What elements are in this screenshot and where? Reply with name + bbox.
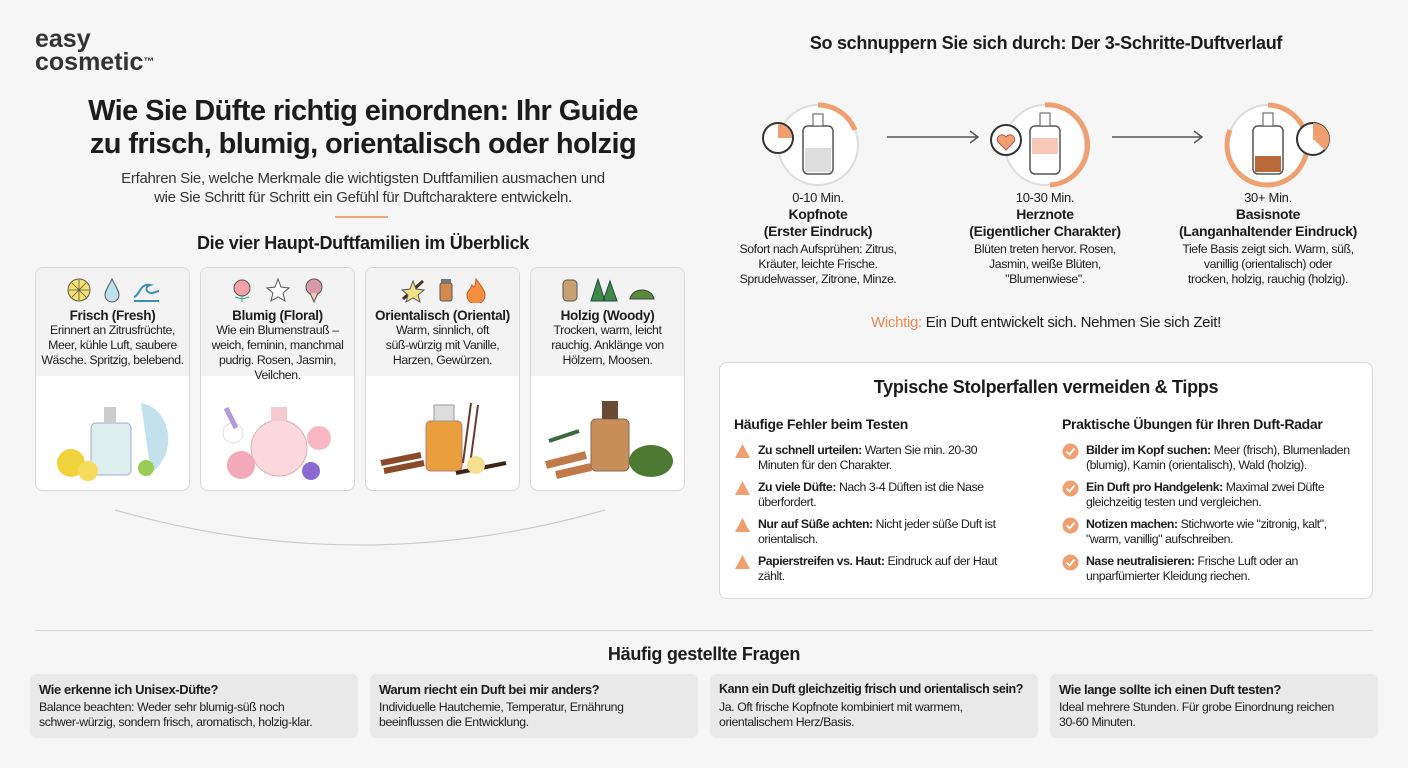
faq 1: [30, 674, 358, 738]
column: mistakes: Papierstreifen vs. Haut: Eindruck auf der Haut: [758, 554, 997, 568]
step 2: Jasmin, weiße Blüten,: [989, 257, 1101, 271]
column: exercises: [1062, 416, 1350, 583]
column: mistakes: Nur auf Süße achten: Nicht jeder süße Duft ist: [758, 517, 996, 531]
step 1: (Erster Eindruck): [764, 223, 872, 239]
column: mistakes: überfordert.: [758, 495, 816, 509]
column: exercises: "warm, vanillig" aufschreiben.: [1086, 532, 1233, 546]
card: orientalisch: süß-würzig mit Vanille, Harzen, Gewürzen.: [386, 338, 499, 367]
column: mistakes: Häufige Fehler beim Testen: [734, 416, 908, 432]
faq 1: schwer-würzig, sondern frisch, aromatisch, holzig-klar.: [39, 715, 312, 729]
faq 1: Wie erkenne ich Unisex-Düfte?: [39, 682, 218, 697]
step 3: Tiefe Basis zeigt sich. Warm, süß,: [1182, 242, 1354, 256]
column: mistakes: Zu viele Düfte: Nach 3-4 Düften ist die Nase: [758, 480, 984, 494]
tips title: Typische Stolperfallen vermeiden & Tipps: [874, 377, 1218, 397]
step 1: Kopfnote: [788, 206, 848, 222]
step 2: Blüten treten hervor. Rosen,: [974, 242, 1116, 256]
step 3: vanillig (orientalisch) oder: [1204, 257, 1332, 271]
column: exercises: (blumig), Kamin (orientalisch), Wald (holzig).: [1086, 458, 1307, 472]
logo: easy: [35, 25, 91, 53]
faq 3: Ja. Oft frische Kopfnote kombiniert mit warmem,: [719, 700, 963, 714]
card: frisch: Erinnert an Zitrusfrüchte, Meer, kühle Luft, saubere Wäsche. Spritzig, belebend.: [41, 323, 184, 367]
heading: families: Die vier Haupt-Duftfamilien im Überblick: [197, 233, 529, 253]
step 2: 10-30 Min.: [1016, 190, 1074, 205]
card: orientalisch: Warm, sinnlich, oft: [396, 323, 489, 337]
step 3: Basisnote: [1236, 206, 1300, 222]
logo: [35, 25, 154, 76]
column: exercises: gleichzeitig testen und vergleichen.: [1086, 495, 1261, 509]
step 2: Herznote: [1016, 206, 1074, 222]
faq 4: [1050, 674, 1378, 738]
faq 3: orientalischem Herz/Basis.: [719, 715, 854, 729]
panel: tips: [719, 362, 1373, 599]
column: mistakes: Minuten für den Charakter.: [758, 458, 892, 472]
step 1: Kräuter, leichte Frische.: [758, 257, 878, 271]
faq 2: beeinflussen die Entwicklung.: [379, 715, 529, 729]
step 3: 30+ Min.: [1244, 190, 1292, 205]
card: blumig: [200, 267, 355, 491]
faq 2: Warum riecht ein Duft bei mir anders?: [379, 682, 599, 697]
step 2: (Eigentlicher Charakter): [969, 223, 1121, 239]
card: frisch: [35, 267, 190, 491]
card: holzig: Holzig (Woody): [561, 308, 654, 323]
card: holzig: Trocken, warm, leicht rauchig. Anklänge von Hölzern, Moosen.: [551, 323, 664, 367]
faq 3: Kann ein Duft gleichzeitig frisch und orientalisch sein?: [719, 682, 1023, 696]
subtitle: Erfahren Sie, welche Merkmale die wichtigsten Duftfamilien ausmachen und: [121, 170, 605, 187]
card: blumig: Blumig (Floral): [232, 308, 323, 323]
title: zu frisch, blumig, orientalisch oder holzig: [90, 128, 636, 160]
column: mistakes: orientalisch.: [758, 532, 818, 546]
heading: 3 steps: So schnuppern Sie sich durch: Der 3-Schritte-Duftverlauf: [810, 33, 1282, 53]
faq 1: Balance beachten: Weder sehr blumig-süß noch: [39, 700, 284, 714]
card: orientalisch: [365, 267, 520, 491]
faq 4: Ideal mehrere Stunden. Für grobe Einordnung reichen: [1059, 700, 1334, 714]
faq 4: 30-60 Minuten.: [1059, 715, 1135, 729]
step icons & arrows: [762, 102, 1330, 188]
column: mistakes: zählt.: [758, 569, 785, 583]
step 3: trocken, holzig, rauchig (holzig).: [1188, 272, 1348, 286]
title: Wie Sie Düfte richtig einordnen: Ihr Guide: [88, 95, 638, 127]
card: blumig: Wie ein Blumenstrauß – weich, feminin, manchmal pudrig. Rosen, Jasmin, Veilchen.: [212, 323, 343, 382]
logo: cosmetic™: [35, 48, 154, 76]
subtitle: [121, 170, 605, 206]
faq 2: Individuelle Hautchemie, Temperatur, Ernährung: [379, 700, 624, 714]
title: [88, 95, 638, 160]
column: exercises: Praktische Übungen für Ihren Duft-Radar: [1062, 416, 1323, 432]
column: exercises: Notizen machen: Stichworte wie "zitronig, kalt",: [1086, 517, 1327, 531]
column: exercises: Ein Duft pro Handgelenk: Maximal zwei Düfte: [1086, 480, 1324, 494]
heading: FAQ: Häufig gestellte Fragen: [608, 644, 800, 664]
decorative arc: [115, 510, 605, 546]
step 1: 0-10 Min.: [792, 190, 844, 205]
faq 2: [370, 674, 698, 738]
faq 4: Wie lange sollte ich einen Duft testen?: [1059, 682, 1281, 697]
step 3: (Langanhaltender Eindruck): [1179, 223, 1357, 239]
step 3: [1179, 190, 1357, 286]
column: exercises: Bilder im Kopf suchen: Meer (frisch), Blumenladen: [1086, 443, 1350, 457]
card: frisch: Frisch (Fresh): [70, 308, 155, 323]
step 1: Sofort nach Aufsprühen: Zitrus,: [739, 242, 897, 256]
card: orientalisch: Orientalisch (Oriental): [375, 308, 510, 323]
column: mistakes: [734, 416, 998, 583]
subtitle: wie Sie Schritt für Schritt ein Gefühl für Duftcharaktere entwickeln.: [154, 189, 572, 206]
step 2: [969, 190, 1121, 286]
column: mistakes: Zu schnell urteilen: Warten Sie min. 20-30: [758, 443, 977, 457]
step 1: [739, 190, 897, 286]
column: exercises: Nase neutralisieren: Frische Luft oder an: [1086, 554, 1298, 568]
column: exercises: unparfümierter Kleidung riechen.: [1086, 569, 1250, 583]
step 2: "Blumenwiese".: [1005, 272, 1085, 286]
step 1: Sprudelwasser, Zitrone, Minze.: [740, 272, 896, 286]
note: wichtig: Wichtig: Ein Duft entwickelt sich. Nehmen Sie sich Zeit!: [871, 314, 1221, 331]
faq 3: [710, 674, 1038, 738]
card: holzig: [530, 267, 685, 491]
